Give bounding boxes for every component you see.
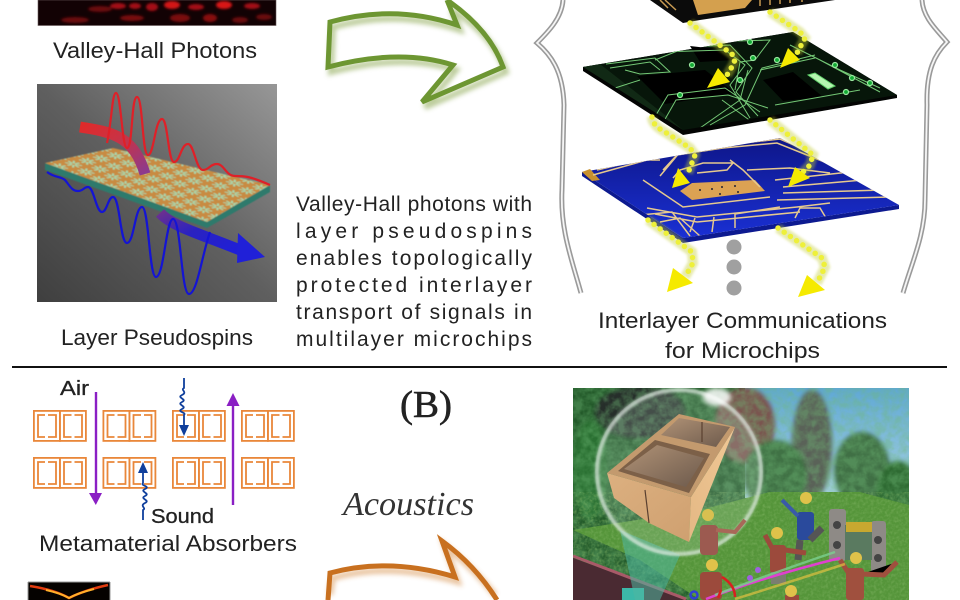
arrow: green outline arrow	[328, 0, 506, 107]
text block: explanation: Valley-Hall photons with	[296, 193, 532, 216]
panel: layer pseudospins rendering	[37, 84, 277, 302]
speakers and mixer	[829, 509, 886, 573]
arrow: air up	[226, 393, 240, 505]
text block: explanation: enables topologically	[296, 247, 532, 270]
absorber box	[607, 414, 735, 542]
chart: dispersion heatmap	[28, 582, 110, 600]
arrow: orange outline arrow	[328, 541, 497, 600]
chart: red wave	[107, 93, 270, 185]
person in red, centre	[765, 527, 806, 584]
background foliage and sky	[572, 386, 920, 600]
signal arrow: green layer left	[690, 23, 734, 88]
person inside bubble	[700, 509, 745, 555]
label: Air: Air	[60, 378, 89, 400]
chart: blue wave	[47, 172, 210, 294]
signal arrow: exit right	[778, 228, 825, 297]
caption: Interlayer Communications for Microchips	[598, 308, 887, 363]
ellipsis: three grey dots	[726, 240, 742, 296]
arrow: incoming red beam	[80, 127, 145, 174]
arrow: outgoing blue beam	[160, 213, 265, 263]
magnifying bubble	[595, 388, 763, 556]
caption: Interlayer Communications for Microchips: Interlayer Communications	[598, 308, 887, 333]
person in blue	[782, 492, 822, 560]
person in red, bottom	[785, 585, 799, 600]
caption: Metamaterial Absorbers: Metamaterial Absorbers	[39, 531, 297, 556]
arrow: sound in from bottom	[138, 462, 148, 520]
projection cone	[620, 530, 680, 600]
text block: explanation	[296, 193, 532, 351]
chip layer: black and gold	[650, 0, 835, 23]
person in red, front	[700, 559, 722, 600]
signal arrow: green layer right	[770, 12, 805, 68]
signal arrow: blue layer right	[770, 120, 813, 187]
brace: right	[903, 0, 947, 293]
person in red, right	[840, 552, 897, 600]
scene: outdoor concert with acoustic absorber	[573, 388, 909, 600]
caption: Layer Pseudospins: Layer Pseudospins	[61, 325, 253, 350]
music note ribbon	[690, 552, 845, 599]
arrow: air down	[89, 392, 102, 505]
signal arrow: exit left	[648, 220, 693, 292]
text block: explanation: multilayer microchips	[296, 328, 532, 351]
slab: layered metamaterial	[45, 148, 270, 228]
text block: explanation: transport of signals in	[296, 301, 532, 324]
brick wall	[573, 556, 688, 600]
text block: explanation: layer pseudospins	[296, 220, 532, 243]
caption: Valley-Hall Photons: Valley-Hall Photons	[53, 38, 257, 63]
lawn	[573, 492, 909, 600]
brace: left	[537, 0, 581, 293]
chip layer: blue and gold circuit	[582, 138, 899, 243]
caption: Interlayer Communications for Microchips: for Microchips	[665, 338, 820, 363]
image: valley-hall photon field strip	[38, 0, 276, 26]
text block: explanation: protected interlayer	[296, 274, 532, 297]
divider line	[12, 366, 947, 368]
heading: (B): (B)	[400, 384, 452, 426]
signal arrow: blue layer left	[652, 117, 695, 188]
chip layer: green circuit	[583, 32, 897, 135]
arrow: sound in from top	[179, 378, 189, 436]
label: Sound: Sound	[151, 506, 214, 528]
label: Acoustics: Acoustics	[341, 486, 474, 523]
diagram: metamaterial absorbers	[34, 378, 294, 528]
